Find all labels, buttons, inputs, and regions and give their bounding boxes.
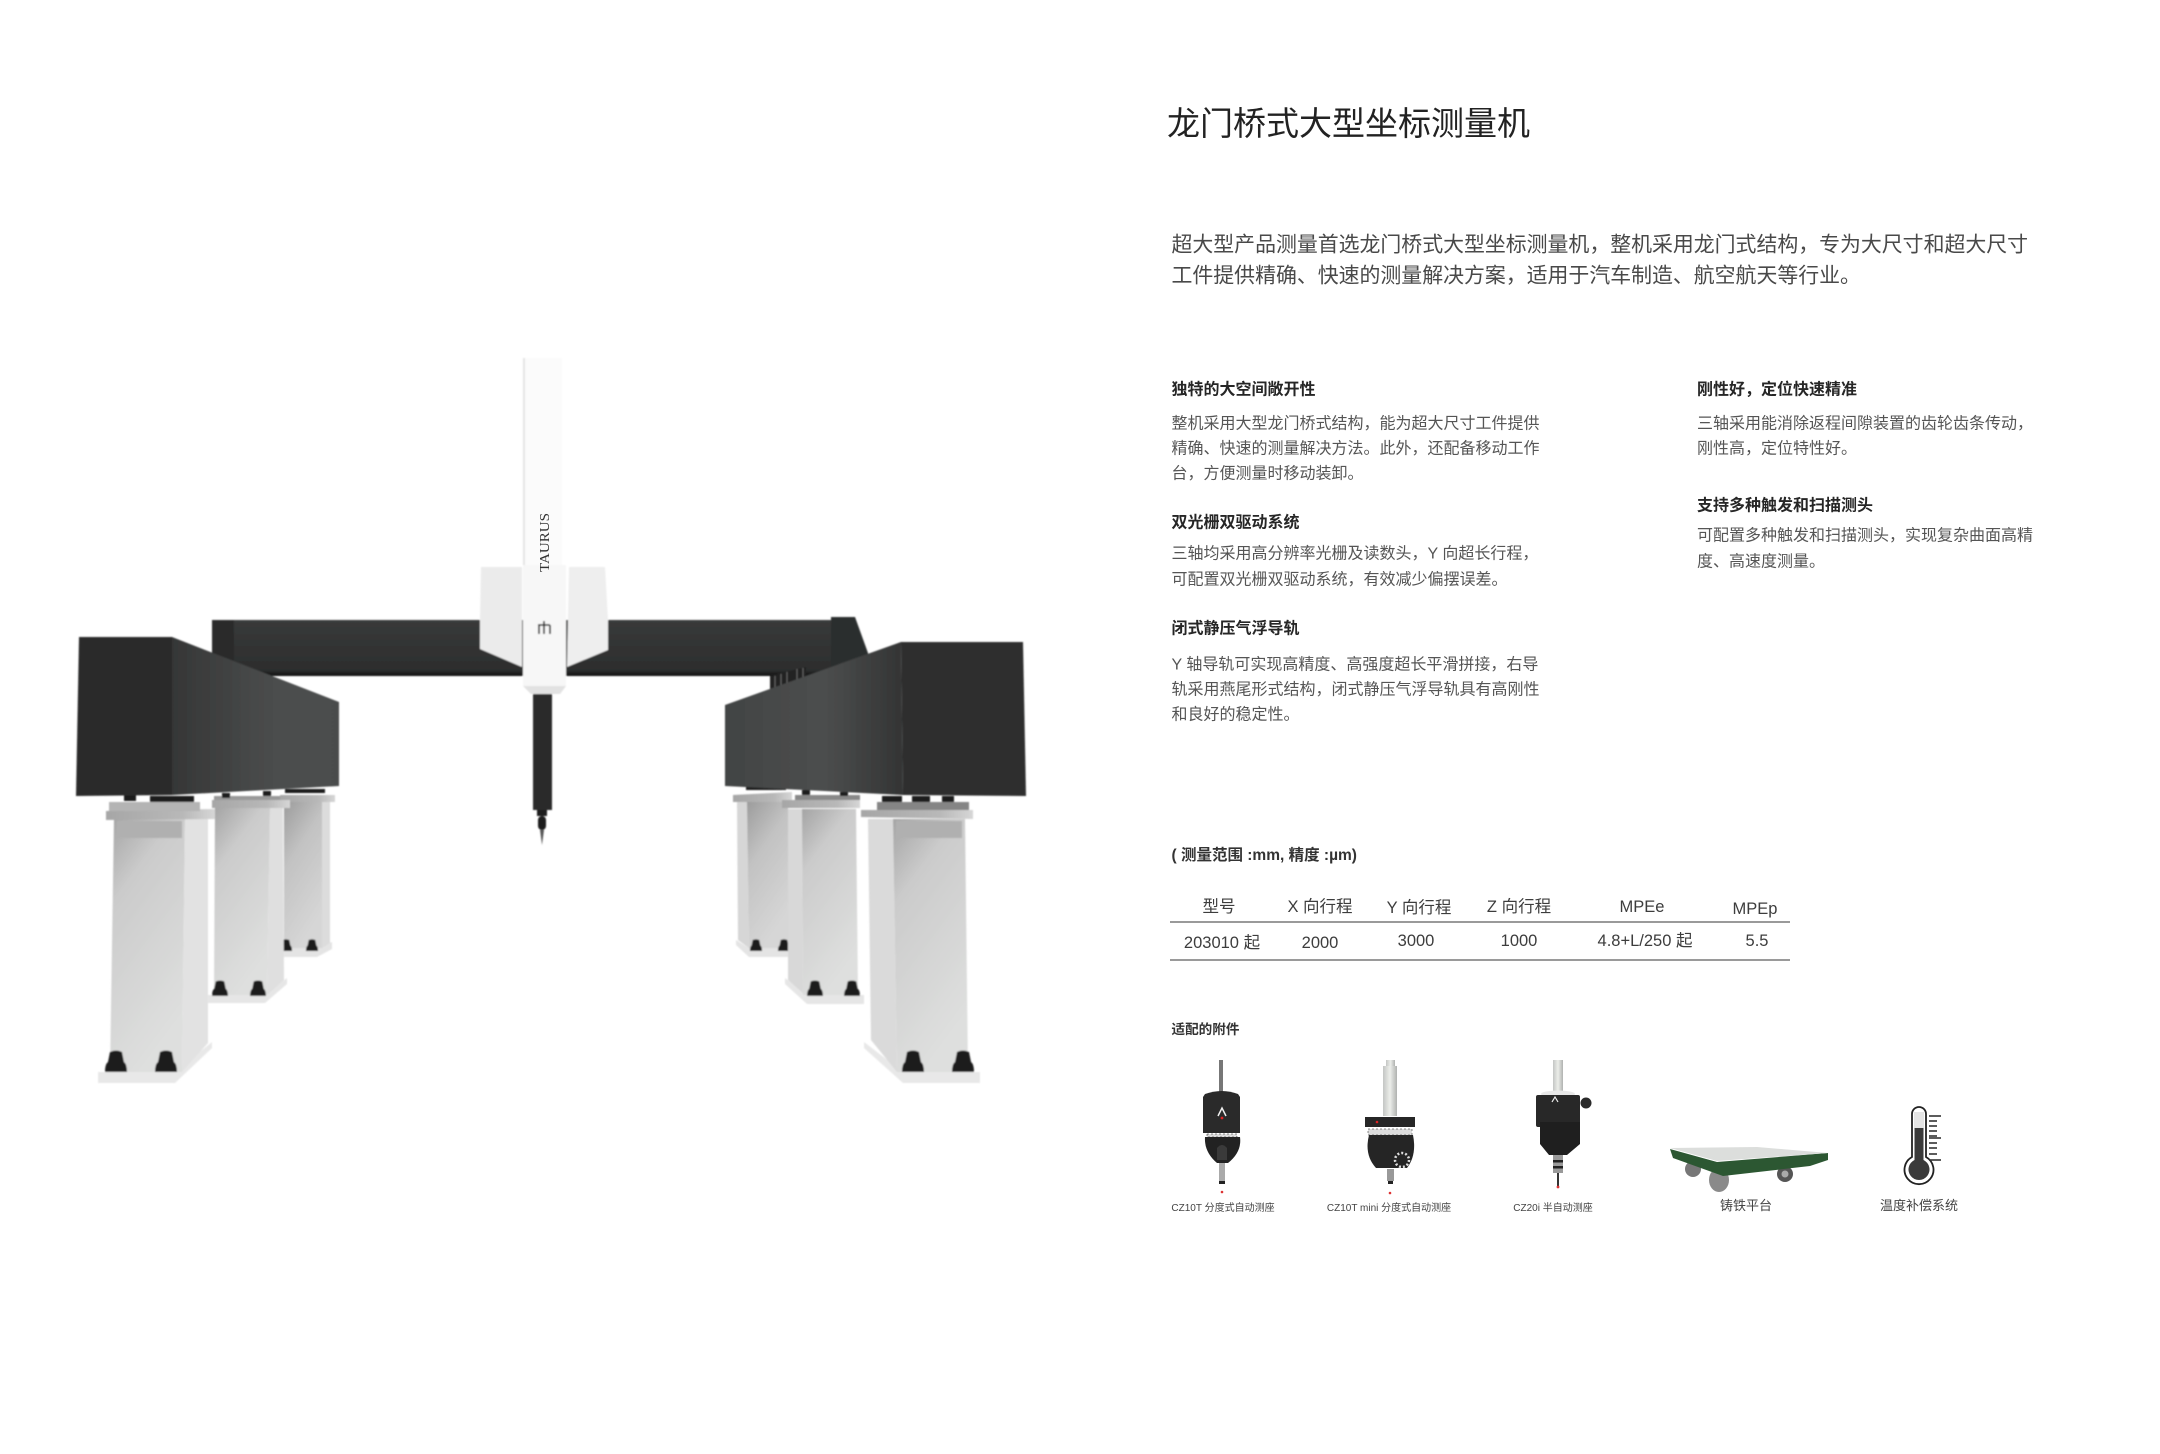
specification table: Z 向行程	[1487, 897, 1551, 916]
Z column	[523, 358, 566, 694]
feature: rigidity: 刚性好，定位快速精准	[1697, 380, 1857, 398]
specification table: MPEp	[1733, 900, 1777, 918]
accessory: CZ10T probe head	[1171, 1060, 1275, 1214]
feature: air bearing guide	[1172, 618, 1540, 724]
intro paragraph: 超大型产品测量首选龙门桥式大型坐标测量机，整机采用龙门式结构，专为大尺寸和超大尺寸	[1172, 234, 2028, 256]
accessory: cast iron platform	[1670, 1147, 1828, 1213]
feature: open space: 整机采用大型龙门桥式结构，能为超大尺寸工件提供	[1172, 414, 1540, 432]
feature: air bearing guide: 轨采用燕尾形式结构，闭式静压气浮导轨具有高刚性	[1172, 680, 1540, 698]
feature: open space	[1172, 380, 1540, 482]
middle right pillar	[782, 795, 864, 1004]
accessories heading: 适配的附件	[1172, 1021, 1240, 1037]
far right pillar	[733, 792, 792, 957]
right rail box	[725, 642, 1026, 796]
caption: 温度补偿系统	[1880, 1198, 1958, 1213]
specification table: 1000	[1501, 932, 1537, 950]
intro paragraph	[1172, 234, 2028, 288]
middle left pillar	[208, 796, 290, 1003]
feature: probes: 可配置多种触发和扫描测头，实现复杂曲面高精	[1697, 526, 2033, 544]
feature: rigidity: 刚性高，定位特性好。	[1697, 440, 1857, 458]
feature: dual grating drive: 双光栅双驱动系统	[1172, 512, 1300, 532]
feature: dual grating drive: 三轴均采用高分辨率光栅及读数头，Y 向超长行程，	[1172, 544, 1538, 562]
specification table: 203010 起	[1184, 933, 1261, 952]
caption: CZ10T mini 分度式自动测座	[1327, 1201, 1451, 1214]
product image: gantry coordinate measuring machine	[76, 358, 1026, 1083]
accessory: CZ20i probe head	[1513, 1060, 1593, 1214]
bearings between rails and pillars	[124, 786, 954, 802]
accessory: temperature compensation thermometer	[1880, 1107, 1958, 1213]
title: 龙门桥式大型坐标测量机	[1167, 105, 1530, 142]
caption: CZ20i 半自动测座	[1513, 1201, 1593, 1214]
feature: open space: 精确、快速的测量解决方法。此外，还配备移动工作	[1172, 440, 1540, 458]
gantry beam	[212, 617, 868, 676]
specification table: 2000	[1302, 934, 1338, 952]
feature: rigidity	[1697, 380, 2033, 458]
accessory: CZ10T mini probe head	[1327, 1060, 1451, 1214]
grating under beam end	[770, 667, 806, 692]
caption: CZ10T 分度式自动测座	[1171, 1201, 1275, 1214]
specification table: 4.8+L/250 起	[1598, 931, 1693, 950]
specification table: MPEe	[1620, 898, 1664, 916]
logo mark	[538, 621, 550, 634]
far left pillar	[280, 795, 335, 957]
feature: open space: 台，方便测量时移动装卸。	[1172, 464, 1364, 482]
table unit note: ( 测量范围 :mm, 精度 :µm)	[1172, 845, 1357, 864]
brand label TAURUS: TAURUS	[538, 513, 553, 572]
feature: open space: 独特的大空间敞开性	[1172, 380, 1316, 398]
feature: air bearing guide: Y 轴导轨可实现高精度、高强度超长平滑拼接，右导	[1172, 656, 1538, 674]
feature: air bearing guide: 和良好的稳定性。	[1172, 706, 1300, 724]
front right pillar	[861, 802, 980, 1083]
feature: probes	[1697, 496, 2033, 570]
intro paragraph: 工件提供精确、快速的测量解决方案，适用于汽车制造、航空航天等行业。	[1172, 264, 1861, 288]
feature: dual grating drive	[1172, 512, 1538, 588]
Z column carriage	[480, 567, 608, 667]
measuring ram and probe tip	[533, 688, 552, 845]
feature: dual grating drive: 可配置双光栅双驱动系统，有效减少偏摆误差。	[1172, 570, 1508, 588]
specification table	[1170, 897, 1790, 961]
specification table: 3000	[1398, 932, 1434, 950]
left rail box	[76, 637, 339, 796]
feature: rigidity: 三轴采用能消除返程间隙装置的齿轮齿条传动，	[1697, 414, 2033, 432]
feature: probes: 度、高速度测量。	[1697, 552, 1825, 570]
feature: probes: 支持多种触发和扫描测头	[1697, 496, 1873, 514]
feature: air bearing guide: 闭式静压气浮导轨	[1172, 618, 1300, 638]
front left pillar	[98, 802, 215, 1083]
specification table: 5.5	[1746, 932, 1768, 950]
specification table: Y 向行程	[1387, 898, 1451, 917]
caption: 铸铁平台	[1720, 1198, 1772, 1213]
specification table: X 向行程	[1287, 897, 1353, 916]
specification table: 型号	[1202, 897, 1236, 916]
